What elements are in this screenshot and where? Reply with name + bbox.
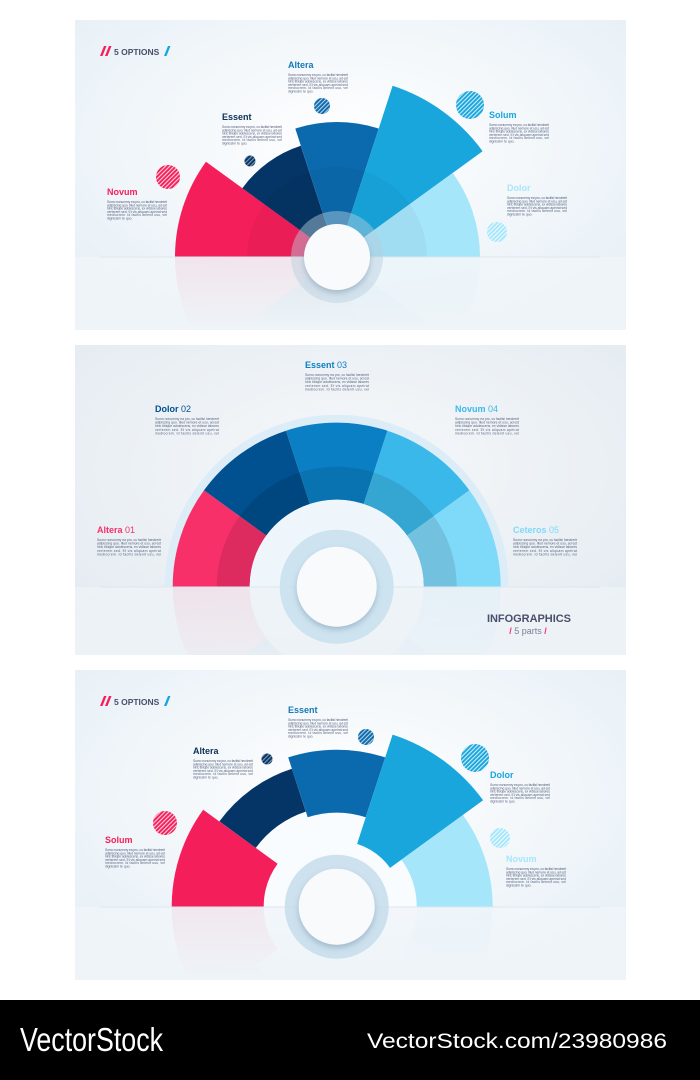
text: labels: adipiscing quo. Illud nemore et usu, ad est xyxy=(288,721,348,725)
text: labels: adipiscing quo. Illud nemore et usu, ad est xyxy=(455,421,519,425)
text: labels: dignissim te quo. xyxy=(489,140,515,144)
text: labels: adipiscing quo. Illud nemore et usu, ad est xyxy=(513,542,577,546)
text: labels: dignissim te quo. xyxy=(222,142,248,146)
text: labels: dignissim te quo. xyxy=(506,884,532,888)
text: labels: verterem sed. Et vis aliquam apeirat xyxy=(155,428,219,432)
text: labels: verterem sed. Et vis aliquam apeirat sed xyxy=(507,206,567,210)
text: labels: dignissim te quo. xyxy=(193,776,219,780)
text: labels: mediocrem. Id facilis delenit usu, vel xyxy=(489,136,549,140)
text: labels: adipiscing quo. Illud nemore et usu, ad est xyxy=(105,851,165,855)
text: labels: hinc tibique adolescens, ex vidisse labores xyxy=(455,424,519,428)
text: labels: mediocrem. Id facilis delenit usu, vel xyxy=(513,552,577,556)
footer: watermark bar: VectorStock xyxy=(20,1021,163,1058)
chart: sectors xyxy=(100,735,600,959)
text: labels: mediocrem. Id facilis delenit usu, vel xyxy=(455,431,519,435)
text: labels: Altera 01 xyxy=(97,525,135,535)
text: labels: verterem sed. Et vis aliquam apeirat xyxy=(305,384,369,388)
text: labels: hinc tibique adolescens, ex vidisse labores xyxy=(107,207,167,211)
text: labels: adipiscing quo. Illud nemore et usu, ad est xyxy=(107,203,167,207)
text: labels: Dolor 02 xyxy=(155,404,191,414)
text: labels: verterem sed. Et vis aliquam apeirat xyxy=(97,549,161,553)
icon: decor circles xyxy=(153,729,510,848)
text: labels: Sumo nonummy ea pro, cu facilisi hendrerit xyxy=(105,848,165,852)
text: labels: hinc tibique adolescens, ex vidisse labores xyxy=(97,545,161,549)
footer: watermark bar xyxy=(0,1000,700,1080)
text: labels: dignissim te quo. xyxy=(107,216,133,220)
text: labels: dignissim te quo. xyxy=(507,212,533,216)
text: labels: Sumo nonummy ea pro, cu facilisi hendrerit xyxy=(507,196,567,200)
text: labels: Ceteros 05 xyxy=(513,525,559,535)
panel 3: 5 options varying donut xyxy=(75,670,626,980)
text: labels: hinc tibique adolescens, ex vidisse labores xyxy=(288,725,348,729)
text: labels: hinc tibique adolescens, ex vidisse labores xyxy=(489,130,549,134)
text: labels: hinc tibique adolescens, ex vidisse labores xyxy=(288,80,348,84)
text: labels: verterem sed. Et vis aliquam apeirat sed xyxy=(107,210,167,214)
text: labels: Solum xyxy=(489,110,517,120)
text: labels: verterem sed. Et vis aliquam apeirat sed xyxy=(222,135,282,139)
text: labels: hinc tibique adolescens, ex vidisse labores xyxy=(222,132,282,136)
title: infographics 5 parts xyxy=(487,613,571,636)
text: labels: adipiscing quo. Illud nemore et usu, ad est xyxy=(490,786,550,790)
text: labels: mediocrem. Id facilis delenit usu, vel xyxy=(105,861,165,865)
text: labels: verterem sed. Et vis aliquam apeirat sed xyxy=(490,793,550,797)
text: labels: mediocrem. Id facilis delenit usu, vel xyxy=(193,772,253,776)
reflection 3 xyxy=(76,908,626,978)
heading: 5 options xyxy=(100,696,170,707)
text: labels xyxy=(105,705,566,888)
text: labels: Sumo nonummy ea pro, cu facilisi hendrerit xyxy=(155,417,219,421)
text: labels: Dolor xyxy=(507,183,531,193)
text: labels: verterem sed. Et vis aliquam apeirat sed xyxy=(506,877,566,881)
text: labels: hinc tibique adolescens, ex vidisse labores xyxy=(193,766,253,770)
chart: donut xyxy=(100,415,600,644)
text: labels: hinc tibique adolescens, ex vidisse labores xyxy=(513,545,577,549)
panel 1: 5 options exploded pie xyxy=(75,20,626,330)
text: labels: Essent xyxy=(222,112,252,122)
text: labels: mediocrem. Id facilis delenit usu, vel xyxy=(288,86,348,90)
text: labels: adipiscing quo. Illud nemore et usu, ad est xyxy=(193,762,253,766)
text: labels: dignissim te quo. xyxy=(105,864,131,868)
panel 2: semicircle donut 5 parts xyxy=(75,345,626,655)
text: labels: mediocrem. Id facilis delenit usu, vel xyxy=(97,552,161,556)
text: labels: dignissim te quo. xyxy=(288,734,314,738)
heading: 5 options: 5 OPTIONS xyxy=(114,697,160,707)
text: labels: adipiscing quo. Illud nemore et usu, ad est xyxy=(305,377,369,381)
text: labels: adipiscing quo. Illud nemore et usu, ad est xyxy=(288,76,348,80)
text: labels: adipiscing quo. Illud nemore et usu, ad est xyxy=(97,542,161,546)
text: labels: adipiscing quo. Illud nemore et usu, ad est xyxy=(155,421,219,425)
text: labels: Sumo nonummy ea pro, cu facilisi hendrerit xyxy=(97,538,161,542)
reflection 1 xyxy=(76,258,626,328)
text: labels: verterem sed. Et vis aliquam apeirat sed xyxy=(193,769,253,773)
text: labels: hinc tibique adolescens, ex vidisse labores xyxy=(305,380,369,384)
text: labels: hinc tibique adolescens, ex vidisse labores xyxy=(506,874,566,878)
text: labels: adipiscing quo. Illud nemore et usu, ad est xyxy=(489,126,549,130)
text: labels: Sumo nonummy ea pro, cu facilisi hendrerit xyxy=(489,123,549,127)
text: labels: Sumo nonummy ea pro, cu facilisi hendrerit xyxy=(288,718,348,722)
footer: watermark bar: VectorStock.com/23980986 xyxy=(367,1030,667,1053)
text: labels: Novum 04 xyxy=(455,404,498,414)
text: labels: verterem sed. Et vis aliquam apeirat sed xyxy=(489,133,549,137)
text: labels: verterem sed. Et vis aliquam apeirat xyxy=(513,549,577,553)
heading: 5 options xyxy=(100,46,170,57)
title: infographics 5 parts: / 5 parts / xyxy=(509,626,547,636)
text: labels: Sumo nonummy ea pro, cu facilisi hendrerit xyxy=(506,867,566,871)
text: labels: Sumo nonummy ea pro, cu facilisi hendrerit xyxy=(288,73,348,77)
text: labels xyxy=(107,60,567,220)
text: labels: Sumo nonummy ea pro, cu facilisi hendrerit xyxy=(513,538,577,542)
text: labels: Dolor xyxy=(490,770,514,780)
text: labels: adipiscing quo. Illud nemore et usu, ad est xyxy=(506,870,566,874)
text: labels: Novum xyxy=(506,854,537,864)
text: labels: adipiscing quo. Illud nemore et usu, ad est xyxy=(507,199,567,203)
text: labels: Essent 03 xyxy=(305,360,347,370)
text: labels: dignissim te quo. xyxy=(288,90,314,94)
text: labels: mediocrem. Id facilis delenit usu, vel xyxy=(107,213,167,217)
text: labels: verterem sed. Et vis aliquam apeirat sed xyxy=(288,728,348,732)
text: labels: Sumo nonummy ea pro, cu facilisi hendrerit xyxy=(193,759,253,763)
title: infographics 5 parts: INFOGRAPHICS xyxy=(487,613,571,625)
text: labels: Altera xyxy=(193,746,220,756)
text: labels: mediocrem. Id facilis delenit usu, vel xyxy=(155,431,219,435)
icon: decor circles xyxy=(156,91,507,242)
text: labels: hinc tibique adolescens, ex vidisse labores xyxy=(490,790,550,794)
text: labels: verterem sed. Et vis aliquam apeirat sed xyxy=(288,83,348,87)
text: labels: Sumo nonummy ea pro, cu facilisi hendrerit xyxy=(107,200,167,204)
text: labels: verterem sed. Et vis aliquam apeirat sed xyxy=(105,858,165,862)
text: labels: mediocrem. Id facilis delenit usu, vel xyxy=(288,731,348,735)
text: labels: mediocrem. Id facilis delenit usu, vel xyxy=(506,880,566,884)
heading: 5 options: 5 OPTIONS xyxy=(114,47,160,57)
text: labels: Sumo nonummy ea pro, cu facilisi hendrerit xyxy=(222,125,282,129)
text: labels: Novum xyxy=(107,187,138,197)
text: labels: Sumo nonummy ea pro, cu facilisi hendrerit xyxy=(305,373,369,377)
text: labels: mediocrem. Id facilis delenit usu, vel xyxy=(222,138,282,142)
text: labels: Altera xyxy=(288,60,315,70)
text: labels: mediocrem. Id facilis delenit usu, vel xyxy=(507,209,567,213)
text: labels xyxy=(97,360,577,556)
chart: sectors xyxy=(100,86,600,303)
text: labels: adipiscing quo. Illud nemore et usu, ad est xyxy=(222,128,282,132)
text: labels: hinc tibique adolescens, ex vidisse labores xyxy=(155,424,219,428)
text: labels: Sumo nonummy ea pro, cu facilisi hendrerit xyxy=(490,783,550,787)
text: labels: Essent xyxy=(288,705,318,715)
text: labels: mediocrem. Id facilis delenit usu, vel xyxy=(490,796,550,800)
text: labels: Solum xyxy=(105,835,133,845)
text: labels: hinc tibique adolescens, ex vidisse labores xyxy=(105,855,165,859)
text: labels: hinc tibique adolescens, ex vidisse labores xyxy=(507,203,567,207)
text: labels: verterem sed. Et vis aliquam apeirat xyxy=(455,428,519,432)
text: labels: dignissim te quo. xyxy=(490,800,516,804)
reflection 2 xyxy=(76,588,624,652)
text: labels: mediocrem. Id facilis delenit usu, vel xyxy=(305,387,369,391)
text: labels: Sumo nonummy ea pro, cu facilisi hendrerit xyxy=(455,417,519,421)
